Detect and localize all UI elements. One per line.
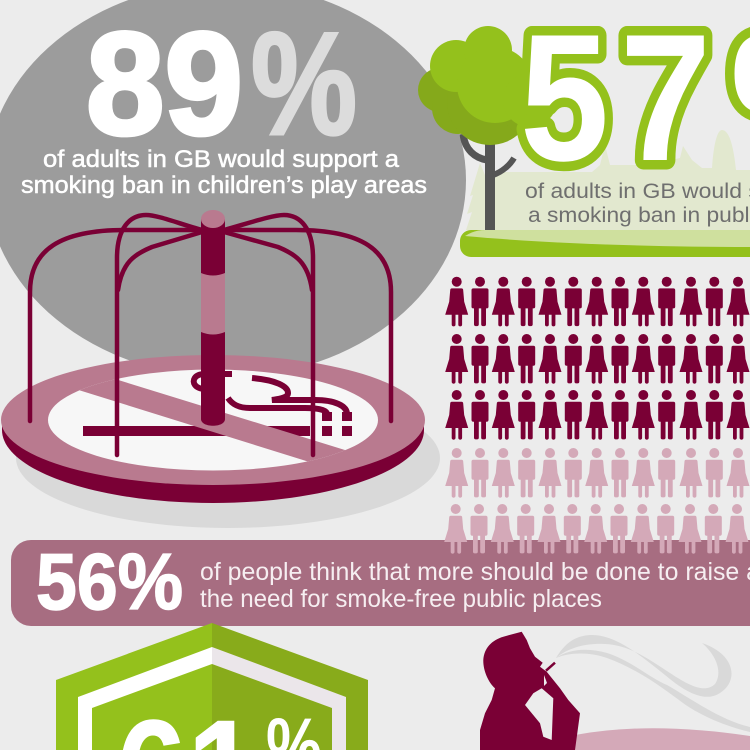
figure 57 percent: 7 (620, 0, 711, 199)
banner background (11, 540, 750, 626)
figure 57 percent (520, 0, 750, 199)
roundabout shadow (16, 388, 440, 528)
banner text: the need for smoke-free public places (200, 585, 602, 613)
pictogram of people (444, 277, 750, 554)
panel: public parks (418, 0, 750, 257)
figure 89 percent: 89 (86, 2, 243, 165)
grey circle backdrop (0, 0, 466, 377)
cigarette (83, 412, 352, 436)
hexagon badge: 61 percent (56, 623, 368, 750)
badge inner (92, 664, 332, 750)
figure 89 percent (86, 2, 357, 165)
banner: 56 percent (11, 537, 750, 626)
banner text (200, 558, 750, 613)
tree crown light (430, 26, 557, 127)
tree trunk (463, 134, 514, 230)
caption: play areas: smoking ban in children’s play areas (21, 172, 427, 199)
roundabout deck (1, 355, 425, 485)
banner text: of people think that more should be done to raise a (200, 558, 750, 586)
cigarette in hand (546, 663, 555, 671)
figure 89 percent: % (251, 2, 357, 165)
skyline of pale trees (466, 130, 750, 230)
roundabout base (2, 422, 424, 503)
grass strip (460, 230, 750, 257)
caption: play areas (21, 146, 427, 199)
panel: play areas (0, 0, 466, 528)
badge white border (78, 647, 346, 750)
caption: play areas: of adults in GB would support a (43, 146, 400, 173)
roundabout rails (30, 215, 391, 455)
roundabout illustration (1, 210, 440, 528)
figure 57 percent: 5 (520, 0, 609, 199)
tree crown dark (418, 59, 547, 145)
smoker illustration (480, 632, 750, 750)
smoke plume (556, 635, 750, 732)
tree (418, 26, 557, 230)
caption: public parks (525, 180, 750, 227)
figure 56 percent: 56% (36, 537, 183, 626)
badge outer (56, 623, 368, 750)
smoke curls (194, 374, 347, 414)
light people rows (444, 448, 750, 554)
smoker silhouette (480, 632, 580, 750)
dark people rows (445, 277, 750, 440)
prohibition bar (80, 380, 345, 462)
roundabout pole (201, 210, 225, 426)
no smoking sign (48, 370, 378, 470)
pink mound (575, 728, 750, 750)
